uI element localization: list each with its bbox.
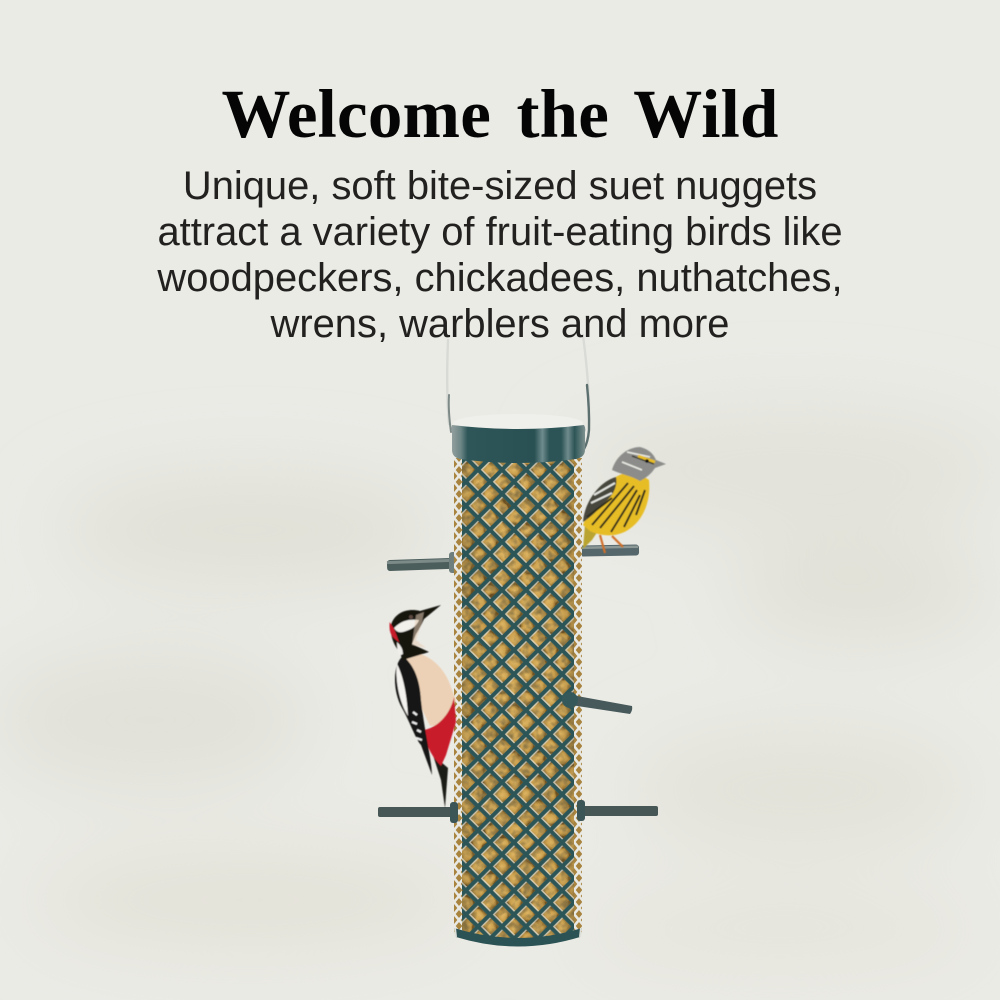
woodpecker wing [395, 656, 432, 775]
perch: upper left [387, 552, 458, 573]
warbler tail [583, 524, 600, 549]
bird: warbler [583, 447, 666, 553]
warbler body [583, 474, 649, 535]
warbler streaks [587, 483, 645, 532]
suet nuggets [454, 459, 582, 938]
feeder tube [454, 458, 582, 938]
perch: lower right [580, 806, 658, 816]
body text: attract a variety of fruit-eating birds like [157, 210, 843, 254]
body text: wrens, warblers and more [271, 302, 729, 346]
metal lattice [454, 457, 582, 948]
woodpecker tail [432, 752, 448, 808]
bird: woodpecker [391, 605, 456, 808]
woodpecker head [391, 605, 441, 660]
illustration: misty background and bird feeder [26, 334, 956, 946]
body text: woodpeckers, chickadees, nuthatches, [157, 256, 843, 300]
warbler head [612, 447, 666, 481]
hanger wire [447, 335, 589, 449]
feeder cap [452, 414, 585, 463]
title: Welcome the Wild [221, 76, 779, 152]
warbler legs [600, 535, 623, 553]
feeder base [454, 928, 582, 946]
perch: middle right [562, 692, 632, 714]
woodpecker belly [404, 652, 456, 726]
body text [157, 164, 843, 346]
perch: upper right [580, 544, 639, 557]
perch: lower left [378, 807, 456, 817]
perches behind feeder [378, 544, 658, 817]
warbler wing [583, 477, 616, 522]
woodpecker red vent [424, 697, 456, 766]
perch bosses [450, 800, 585, 823]
body text: Unique, soft bite-sized suet nuggets [183, 164, 817, 208]
